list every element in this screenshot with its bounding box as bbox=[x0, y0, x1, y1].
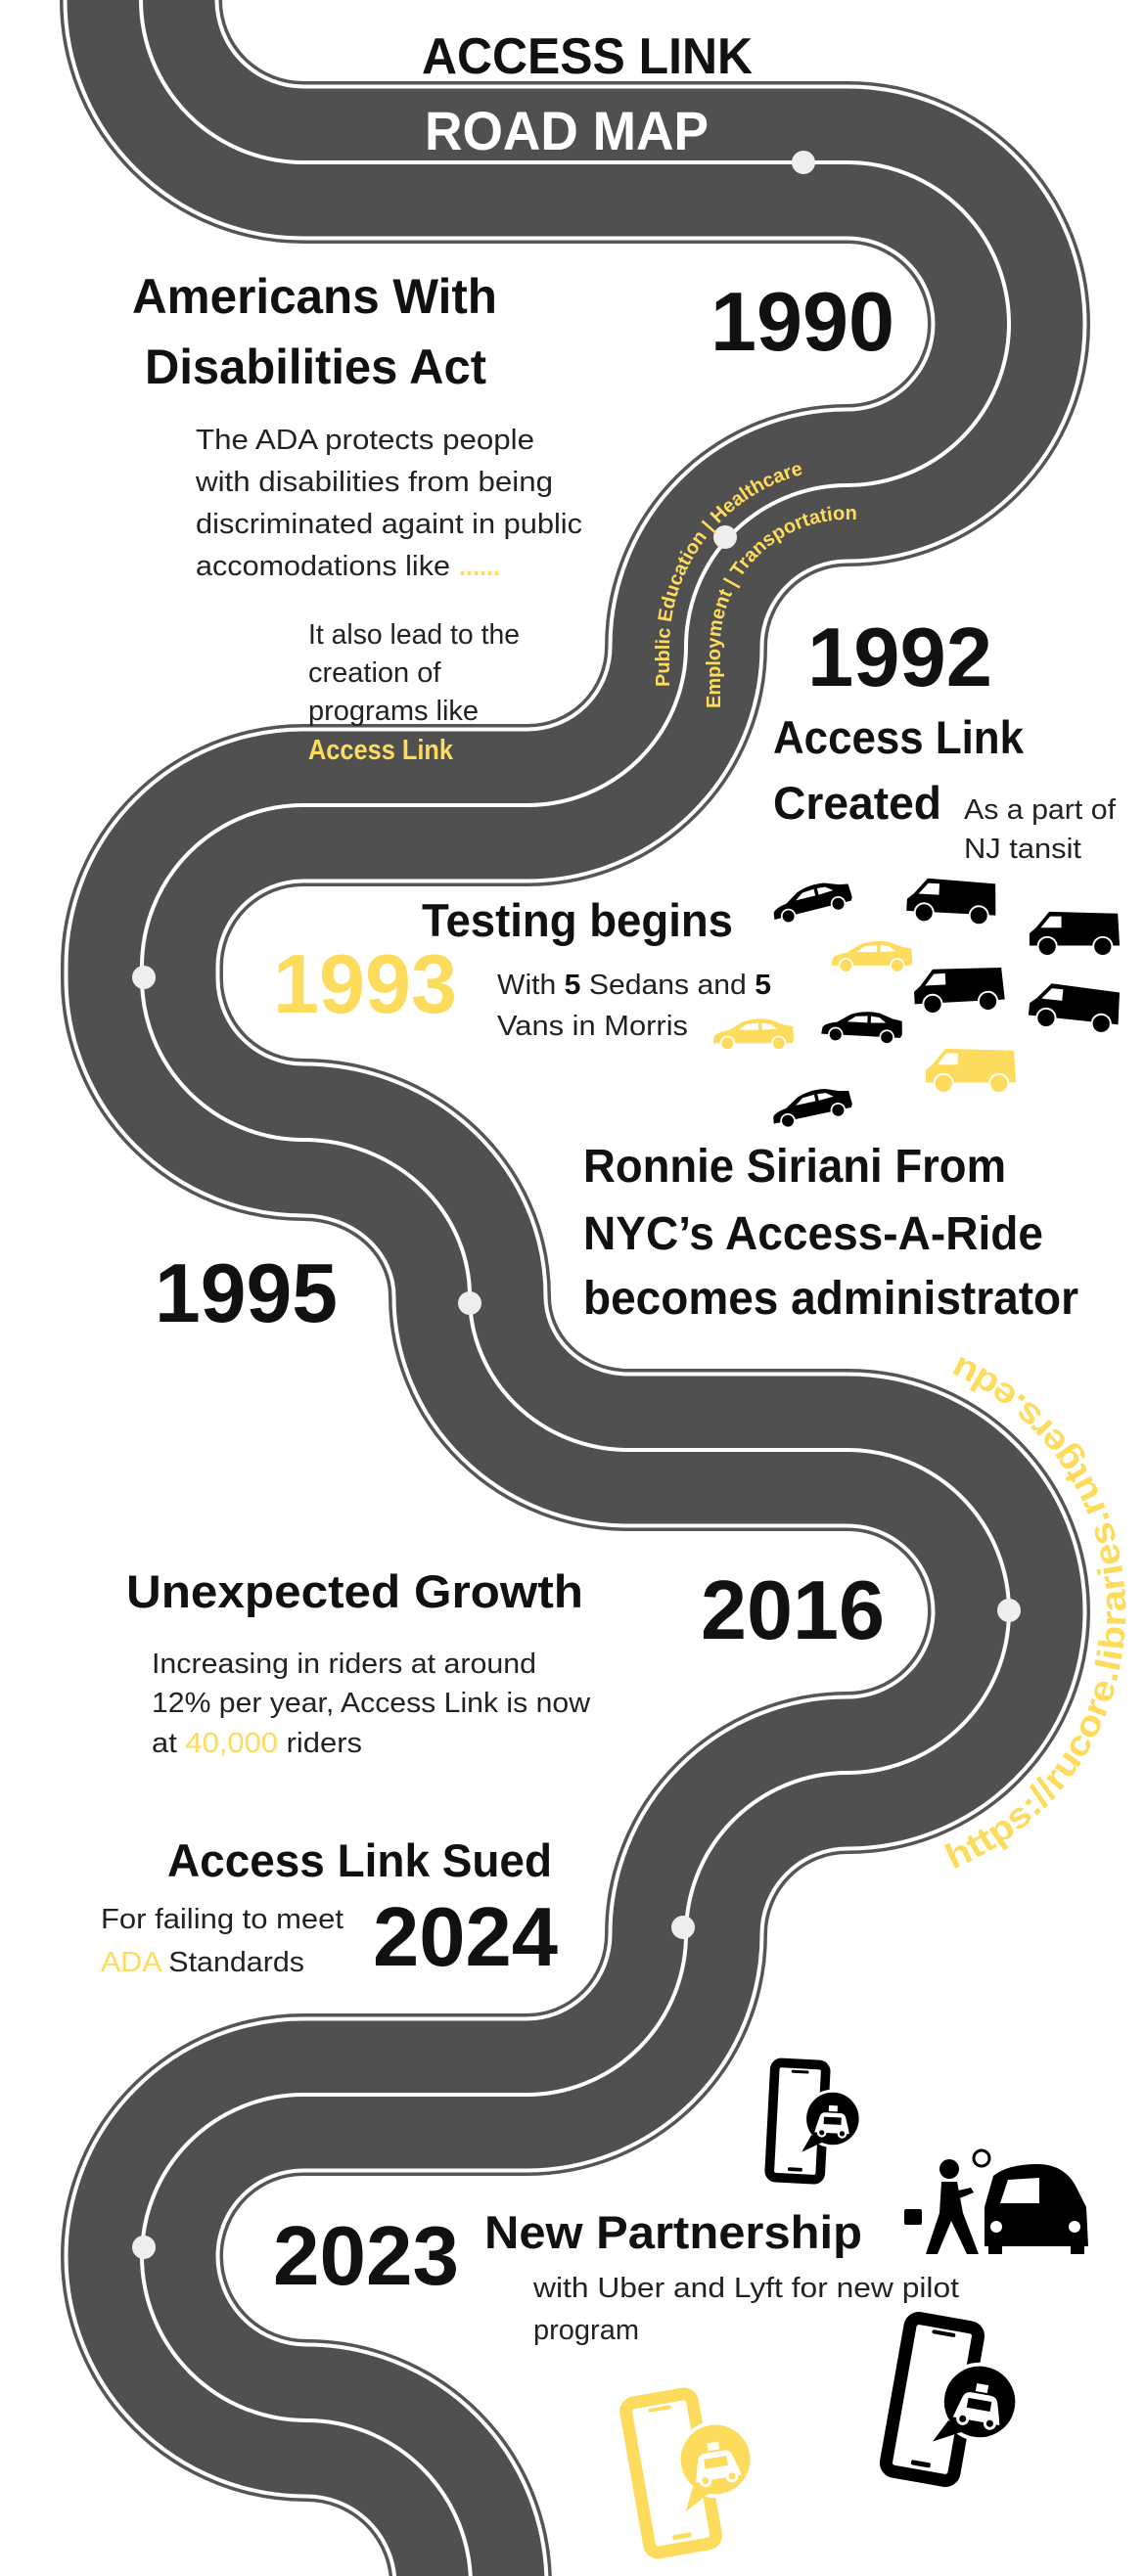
source url: https://rucore.libraries.rutgers.edu bbox=[944, 1356, 1125, 1869]
2016 block bbox=[126, 1564, 885, 1759]
2024 block: 2024 bbox=[373, 1891, 558, 1984]
1990 ADA block: creation of bbox=[308, 657, 441, 689]
title: ROAD MAP bbox=[425, 100, 709, 161]
2023 block: 2023 bbox=[273, 2210, 459, 2303]
1995 block: NYC’s Access-A-Ride bbox=[583, 1208, 1043, 1260]
1992 block: Created bbox=[773, 777, 941, 829]
2016 block: 2016 bbox=[701, 1564, 885, 1657]
1990 ADA block: It also lead to the bbox=[308, 619, 520, 651]
1990 ADA block: Disabilities Act bbox=[145, 339, 486, 394]
2024 block bbox=[101, 1834, 558, 1984]
1993 block: Testing begins bbox=[422, 894, 733, 946]
icon: phone with taxi (top) bbox=[769, 2062, 863, 2182]
1990 ADA block: Americans With bbox=[132, 269, 497, 324]
2024 block: Access Link Sued bbox=[167, 1834, 552, 1886]
road labels: ADA areas bbox=[655, 466, 856, 707]
2016 block: Increasing in riders at around bbox=[152, 1649, 536, 1680]
2023 block bbox=[273, 2206, 959, 2346]
icon: yellow phone with taxi bbox=[624, 2384, 765, 2553]
1990 ADA block: discriminated againt in public bbox=[196, 509, 582, 540]
1990 ADA block: programs like bbox=[308, 696, 479, 727]
1992 block: As a part of bbox=[964, 794, 1117, 826]
2016 block: Unexpected Growth bbox=[126, 1565, 583, 1617]
road labels: ADA areas: Public Education | Healthcare bbox=[655, 466, 802, 686]
2023 block: New Partnership bbox=[484, 2206, 862, 2258]
1993 block: Vans in Morris bbox=[497, 1011, 688, 1042]
1992 block: NJ tansit bbox=[964, 834, 1081, 865]
1990 ADA block: 1990 bbox=[710, 276, 894, 369]
title bbox=[422, 28, 753, 161]
1995 block: 1995 bbox=[155, 1247, 338, 1340]
1992 block: Access Link bbox=[773, 711, 1025, 763]
2023 block: with Uber and Lyft for new pilot bbox=[532, 2273, 959, 2304]
2023 block: program bbox=[533, 2315, 639, 2346]
1995 block bbox=[155, 1141, 1078, 1340]
2024 block: For failing to meet bbox=[101, 1904, 344, 1935]
icon: person hailing car bbox=[904, 2150, 1088, 2254]
road bbox=[141, 0, 1009, 2576]
icon: black phone with taxi (bottom right) bbox=[885, 2317, 1029, 2491]
2016 block: at 40,000 riders bbox=[152, 1728, 362, 1759]
1995 block: becomes administrator bbox=[583, 1273, 1078, 1325]
1993 block: With 5 Sedans and 5 bbox=[497, 970, 771, 1001]
1993 block: 1993 bbox=[273, 938, 457, 1031]
2016 block: 12% per year, Access Link is now bbox=[152, 1688, 591, 1719]
1995 block: Ronnie Siriani From bbox=[583, 1141, 1006, 1193]
2024 block: ADA Standards bbox=[101, 1947, 304, 1978]
1993 block bbox=[273, 894, 771, 1042]
title: ACCESS LINK bbox=[422, 28, 753, 85]
1990 ADA block: with disabilities from being bbox=[195, 467, 553, 498]
1992 block: 1992 bbox=[807, 611, 992, 704]
road labels: ADA areas: Employment | Transportation bbox=[706, 507, 856, 707]
vehicles bbox=[713, 877, 1122, 1130]
1992 block bbox=[773, 611, 1117, 865]
1990 ADA block: The ADA protects people bbox=[196, 425, 534, 456]
1990 ADA block: ...... bbox=[459, 551, 500, 582]
1990 ADA block bbox=[132, 269, 894, 766]
1990 ADA block: accomodations like bbox=[196, 551, 450, 582]
milestone dots bbox=[132, 151, 1021, 2259]
1990 ADA block: Access Link bbox=[308, 735, 454, 766]
